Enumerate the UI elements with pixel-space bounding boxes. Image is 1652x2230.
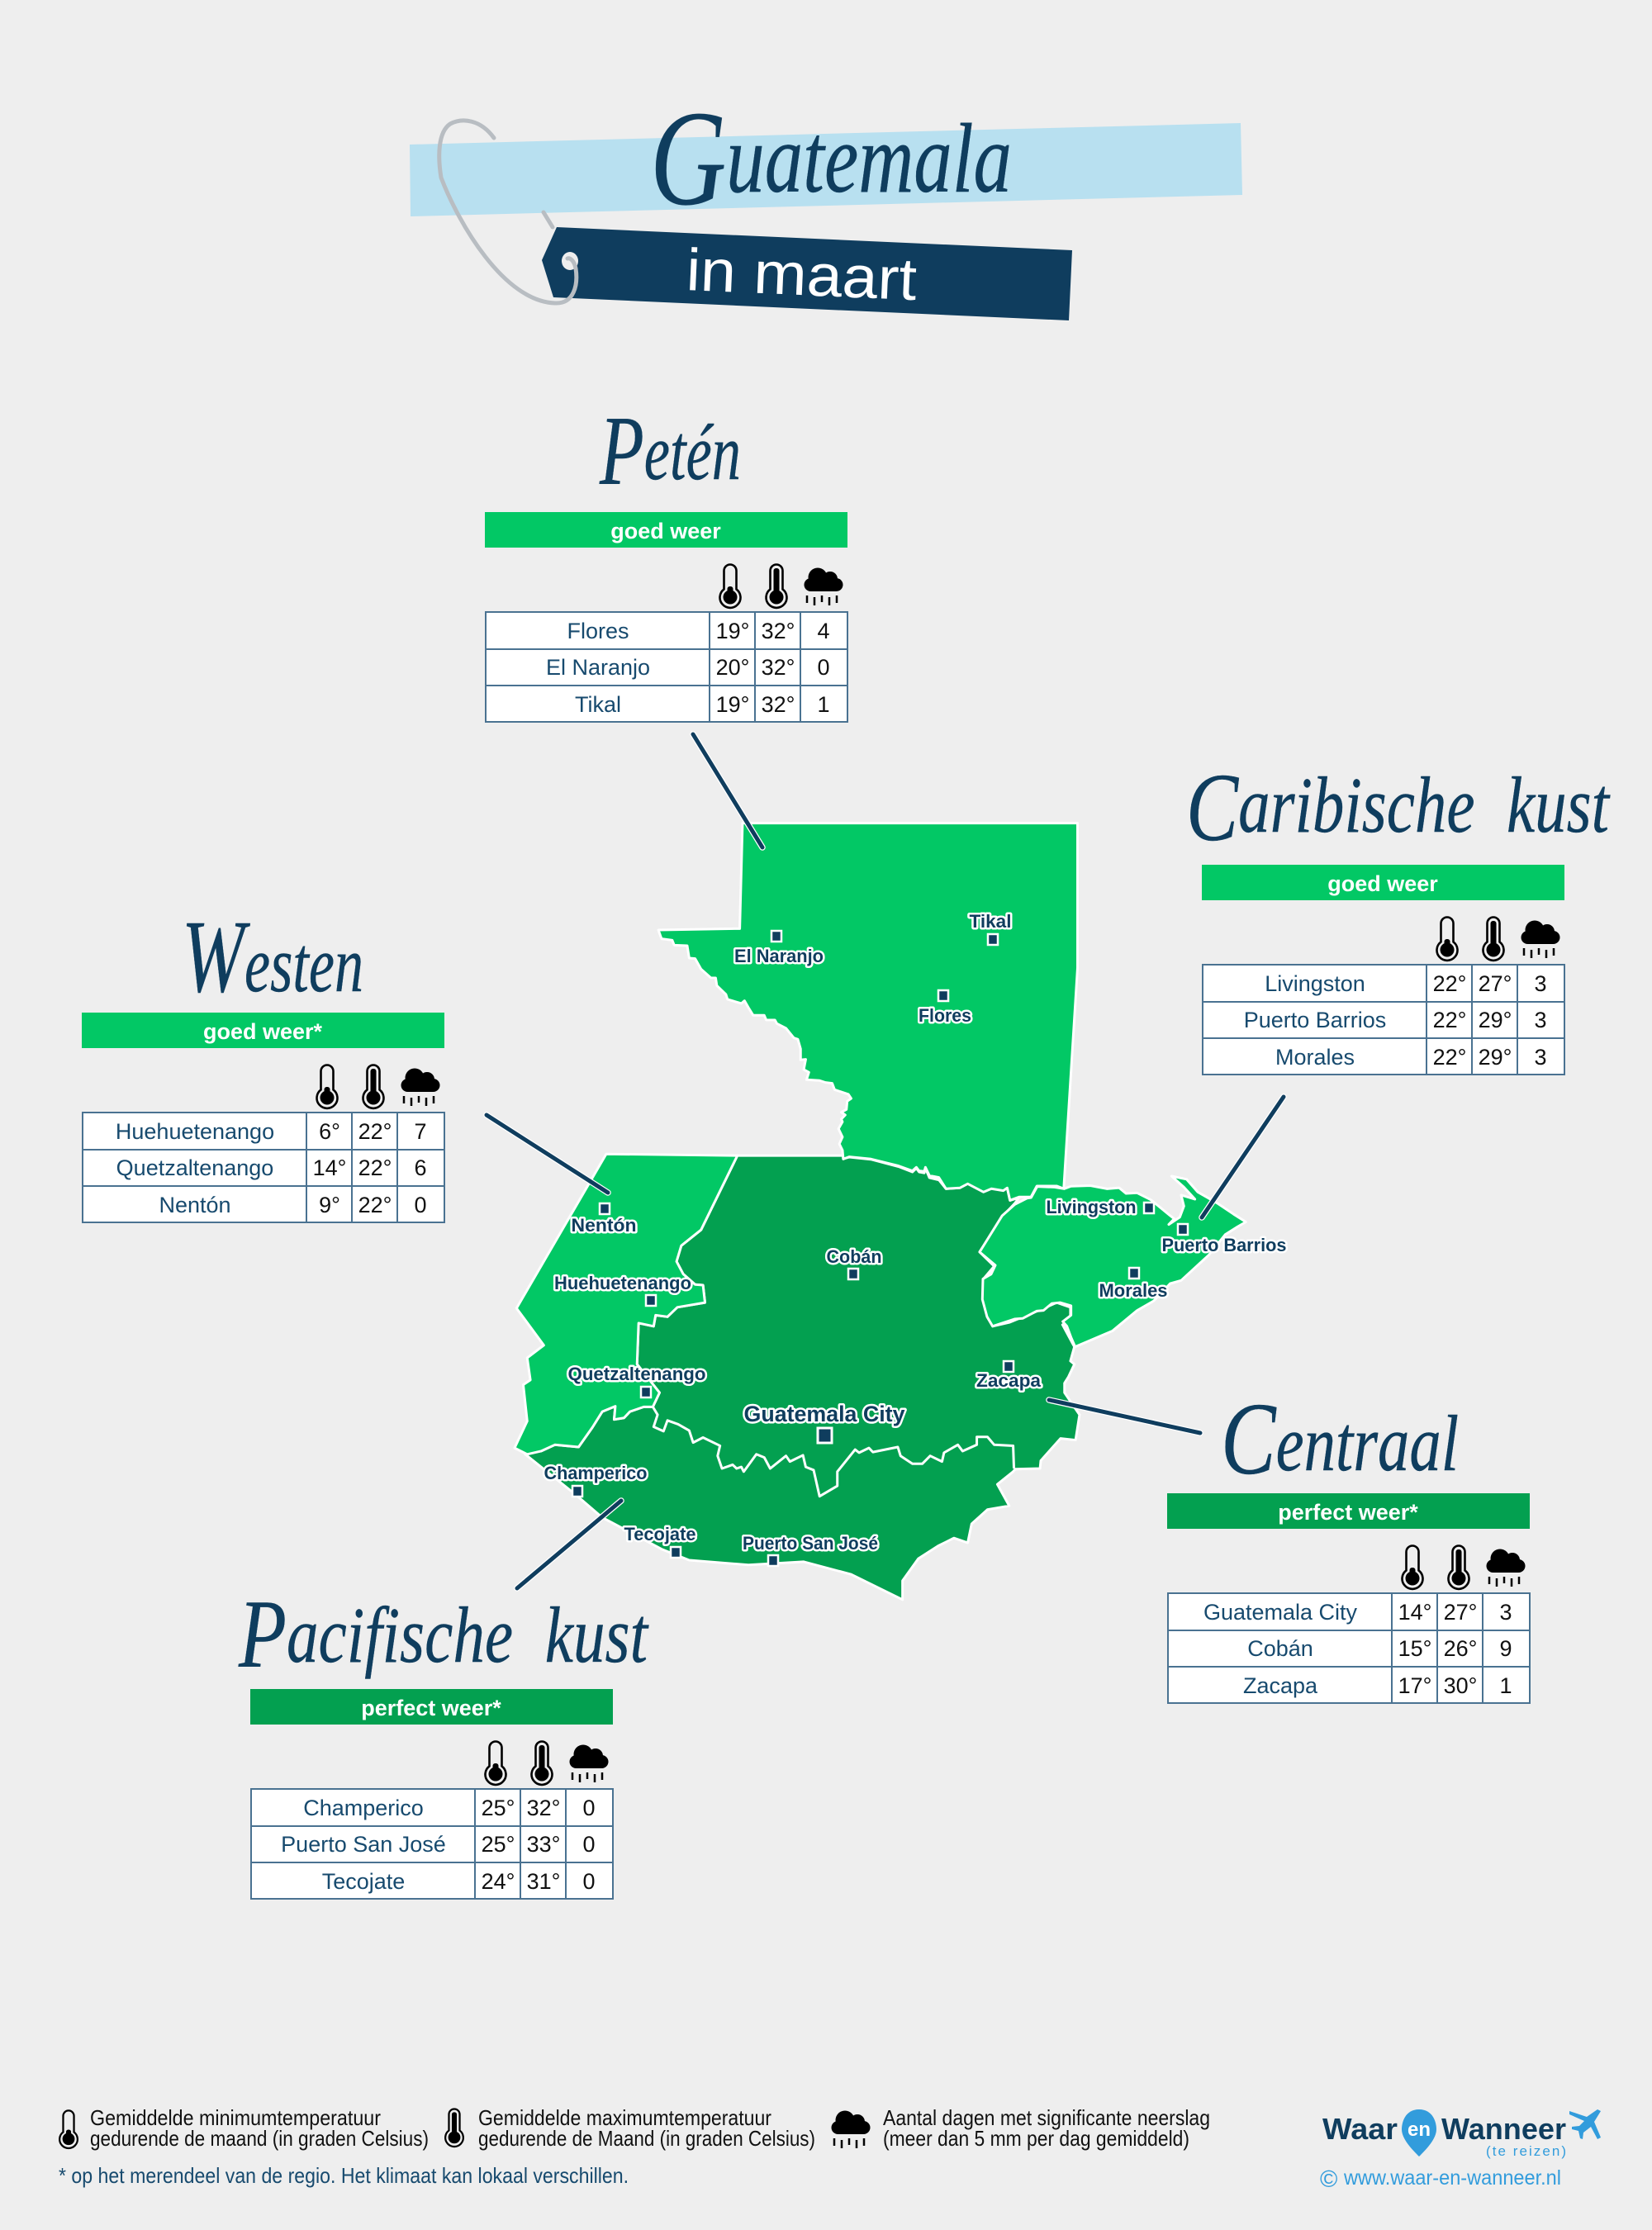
table: 19° — [716, 692, 749, 717]
table: 3 — [1534, 971, 1547, 996]
city labels: Tikal — [970, 911, 1011, 932]
table: 25° — [482, 1796, 515, 1820]
legend: rain days — [831, 2105, 1210, 2151]
subtitle: in maart: in maart — [685, 237, 919, 313]
heading: Petén: etén — [644, 408, 741, 496]
heading: Westen: Westen — [182, 900, 363, 1014]
title tag — [410, 83, 1242, 320]
icons — [486, 1741, 608, 1785]
logo wordmark right: Wanneer — [1441, 2112, 1566, 2146]
rating bar: goed weer — [1327, 871, 1438, 896]
table: 14° — [1398, 1600, 1431, 1625]
logo en: en — [1408, 2118, 1431, 2141]
city markers — [572, 931, 1188, 1566]
table: 3 — [1534, 1008, 1547, 1032]
city labels: Huehuetenango — [554, 1273, 691, 1293]
table: 1 — [1499, 1673, 1512, 1698]
title: Guatemala: uatemala — [726, 103, 1012, 213]
table — [83, 1113, 444, 1222]
panel: Caribische kust — [1186, 753, 1611, 1075]
region: Westen — [515, 1154, 738, 1454]
website url: www.waar-en-wanneer.nl — [1343, 2166, 1561, 2190]
table: 22° — [1433, 1045, 1466, 1070]
table: Morales — [1275, 1045, 1355, 1070]
table: 22° — [1433, 971, 1466, 996]
navy tag — [542, 227, 1072, 320]
table: 0 — [414, 1193, 427, 1217]
city labels: Puerto San José — [743, 1533, 878, 1554]
table: 6° — [319, 1119, 340, 1144]
legend: minimum temperature — [59, 2105, 429, 2151]
panel: Petén — [485, 396, 847, 722]
legend: minimum temperature: Gemiddelde minimumtemperatuur — [90, 2105, 381, 2130]
table: 14° — [313, 1155, 346, 1180]
table — [1203, 965, 1564, 1075]
table: 0 — [817, 655, 830, 680]
table: 25° — [482, 1832, 515, 1857]
rating bar: goed weer* — [203, 1019, 323, 1044]
icons — [1437, 917, 1559, 961]
table — [1168, 1593, 1530, 1703]
table: 9 — [1499, 1636, 1512, 1661]
table: Guatemala City — [1203, 1600, 1358, 1625]
table: 22° — [1433, 1008, 1466, 1032]
table: 0 — [582, 1869, 596, 1894]
table: 32° — [762, 655, 795, 680]
table: 7 — [414, 1119, 427, 1144]
table: 19° — [716, 619, 749, 643]
title: Guatemala: G — [650, 83, 726, 234]
rating bar — [82, 1013, 444, 1048]
logo tagline: (te reizen) — [1486, 2143, 1566, 2159]
rating bar: perfect weer* — [1278, 1500, 1418, 1525]
city labels: Puerto Barrios — [1161, 1235, 1287, 1255]
panel: Westen — [82, 900, 444, 1222]
logo wordmark left: Waar — [1322, 2112, 1398, 2146]
panel: Centraal — [1167, 1383, 1530, 1703]
table: 32° — [762, 619, 795, 643]
rating bar: goed weer — [610, 519, 721, 543]
legend: minimum temperature: gedurende de maand (in graden Celsius) — [90, 2126, 429, 2151]
rating bar: perfect weer* — [361, 1696, 501, 1720]
legend: rain days: (meer dan 5 mm per dag gemiddeld) — [883, 2126, 1189, 2151]
table: Puerto Barrios — [1244, 1008, 1386, 1032]
logo plane — [1569, 2109, 1601, 2139]
table: 26° — [1444, 1636, 1477, 1661]
city labels: Quetzaltenango — [568, 1364, 705, 1384]
city labels: Livingston — [1046, 1197, 1137, 1217]
table: Tecojate — [322, 1869, 405, 1894]
table: 22° — [358, 1119, 392, 1144]
city labels: Guatemala City — [743, 1402, 905, 1426]
border between Centraal and Pacifische kust — [653, 1407, 1014, 1497]
heading: Centraal: C — [1221, 1383, 1277, 1497]
table: Huehuetenango — [116, 1119, 274, 1144]
table: 17° — [1398, 1673, 1431, 1698]
city labels: Nentón — [572, 1215, 636, 1236]
table: Zacapa — [1243, 1673, 1318, 1698]
table: Cobán — [1247, 1636, 1313, 1661]
table: 22° — [358, 1155, 392, 1180]
light blue title banner — [410, 123, 1242, 216]
region: Petén — [658, 823, 1078, 1200]
table: Flores — [567, 619, 629, 643]
heading: Centraal: entraal — [1276, 1399, 1459, 1487]
legend — [59, 2105, 1210, 2188]
legend: maximum temperature — [445, 2105, 815, 2151]
table: 32° — [762, 692, 795, 717]
table: 27° — [1444, 1600, 1477, 1625]
table: 20° — [716, 655, 749, 680]
leader lines — [487, 734, 1284, 1588]
region: Caribische kust — [980, 1176, 1246, 1347]
table: Nentón — [159, 1193, 231, 1217]
table — [251, 1789, 613, 1899]
table: Champerico — [303, 1796, 424, 1820]
table: Puerto San José — [281, 1832, 446, 1857]
map of Guatemala — [515, 823, 1287, 1600]
city labels: Morales — [1099, 1280, 1168, 1301]
table: El Naranjo — [546, 655, 650, 680]
icons — [317, 1065, 439, 1108]
table: 0 — [582, 1832, 596, 1857]
table: 9° — [319, 1193, 340, 1217]
city labels: El Naranjo — [734, 946, 824, 966]
rating bar — [250, 1689, 613, 1725]
heading: Petén: P — [599, 396, 644, 505]
table: 6 — [414, 1155, 427, 1180]
table: 32° — [527, 1796, 560, 1820]
string loop — [439, 121, 577, 303]
rating bar — [485, 512, 847, 548]
legend: maximum temperature: gedurende de Maand (in graden Celsius) — [478, 2126, 815, 2151]
city labels: Zacapa — [976, 1370, 1042, 1391]
icons — [1403, 1546, 1525, 1589]
heading: Caribische kust: C — [1186, 753, 1239, 861]
region: Centraal and Pacifische kust — [525, 1155, 1080, 1600]
table: Quetzaltenango — [116, 1155, 273, 1180]
icons — [720, 565, 843, 608]
table: 15° — [1398, 1636, 1431, 1661]
table — [486, 612, 847, 722]
table: 4 — [817, 619, 830, 643]
table: 1 — [817, 692, 830, 717]
city labels: Cobán — [826, 1246, 882, 1267]
city labels — [544, 911, 1287, 1554]
logo — [1320, 2109, 1601, 2193]
table: 29° — [1479, 1045, 1512, 1070]
legend: maximum temperature: Gemiddelde maximumtemperatuur — [478, 2105, 771, 2130]
logo pin — [1402, 2109, 1436, 2156]
panel: Pacifische kust — [238, 1580, 649, 1899]
table: 22° — [358, 1193, 392, 1217]
table: Livingston — [1265, 971, 1365, 996]
table: 33° — [527, 1832, 560, 1857]
rating bar — [1167, 1493, 1530, 1529]
footnote: * op het merendeel van de regio. Het klimaat kan lokaal verschillen. — [59, 2163, 629, 2188]
heading: Pacifische kust: P — [238, 1580, 287, 1688]
table: Tikal — [575, 692, 621, 717]
table: 3 — [1534, 1045, 1547, 1070]
table: 3 — [1499, 1600, 1512, 1625]
table: 29° — [1479, 1008, 1512, 1032]
city labels: Flores — [919, 1005, 971, 1026]
table: 30° — [1444, 1673, 1477, 1698]
table: 24° — [482, 1869, 515, 1894]
tag hole — [562, 252, 578, 270]
city labels: Champerico — [544, 1463, 648, 1483]
legend: rain days: Aantal dagen met significante neerslag — [883, 2105, 1210, 2130]
table: 0 — [582, 1796, 596, 1820]
table: 27° — [1479, 971, 1512, 996]
heading: Pacifische kust: acifische kust — [287, 1591, 649, 1679]
rating bar — [1202, 865, 1564, 900]
website: © — [1320, 2166, 1337, 2193]
table: 31° — [527, 1869, 560, 1894]
city labels: Tecojate — [624, 1524, 695, 1544]
